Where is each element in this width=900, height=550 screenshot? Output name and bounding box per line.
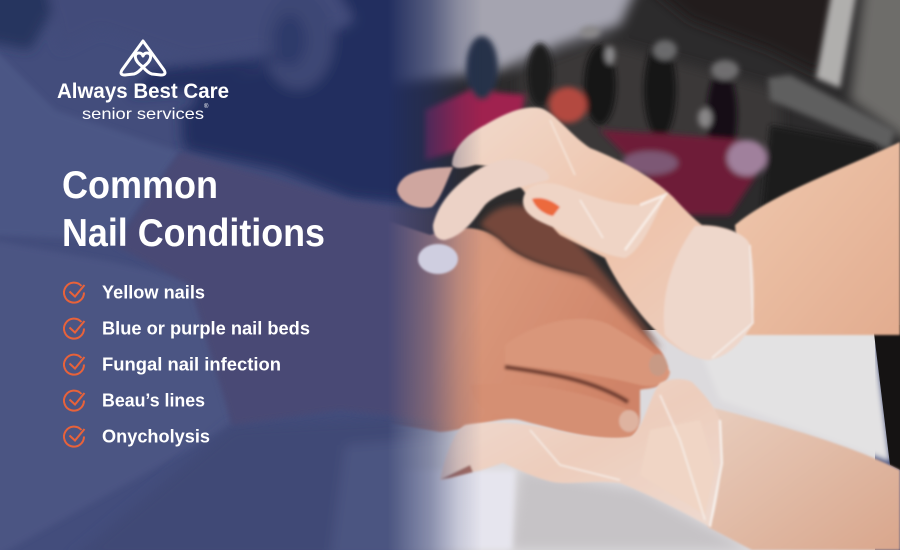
item: Beau's lines: Beau’s lines bbox=[102, 390, 205, 410]
registered mark: ® bbox=[204, 103, 209, 110]
title bbox=[62, 164, 325, 255]
right scene: dark salon shelf bbox=[0, 0, 900, 340]
title: Nail Conditions bbox=[62, 212, 325, 255]
patient's hand bbox=[340, 205, 670, 439]
nail polish bottles bbox=[425, 26, 880, 230]
item: blue or purple nail beds: Blue or purple nail beds bbox=[102, 318, 310, 338]
towel bbox=[0, 325, 890, 550]
brand tagline: senior services bbox=[82, 106, 204, 123]
lower gloved hand bbox=[440, 379, 722, 527]
helper's upper forearm bbox=[735, 142, 900, 335]
item: fungal nail infection: Fungal nail infection bbox=[102, 354, 281, 374]
helper's lower forearm bbox=[708, 408, 900, 550]
shadow between fingers bbox=[505, 367, 628, 402]
palm, index finger and cuff bbox=[452, 107, 754, 360]
item: onycholysis: Onycholysis bbox=[102, 426, 210, 446]
thumb bbox=[523, 183, 665, 258]
upper gloved hand bbox=[452, 107, 754, 360]
upper finger bbox=[505, 319, 670, 386]
checklist of nail conditions bbox=[64, 282, 310, 447]
lotion dab bbox=[418, 244, 458, 274]
brand name: Always Best Care bbox=[57, 80, 229, 103]
white strap highlight bbox=[816, 0, 857, 88]
patient's forearm under tint bbox=[175, 154, 416, 420]
icon: triangle with heart bbox=[121, 41, 165, 75]
brand logo bbox=[57, 41, 229, 123]
pale wall behind bottles bbox=[380, 0, 900, 170]
item: yellow nails: Yellow nails bbox=[102, 282, 205, 302]
dark strip at right edge bbox=[873, 325, 900, 470]
orange painted nail bbox=[532, 198, 560, 216]
side fingertip over the fade bbox=[397, 167, 453, 208]
title: Common bbox=[62, 164, 218, 207]
fingernails bbox=[619, 410, 639, 432]
cuff highlight bbox=[664, 226, 754, 360]
lower finger bbox=[470, 384, 639, 439]
shadow under gloved hand bbox=[480, 205, 662, 350]
grey counter band bbox=[768, 75, 895, 150]
middle gloved finger over the fade bbox=[433, 159, 549, 240]
left scene: navy tinted background, fading into the photo bbox=[0, 0, 520, 550]
